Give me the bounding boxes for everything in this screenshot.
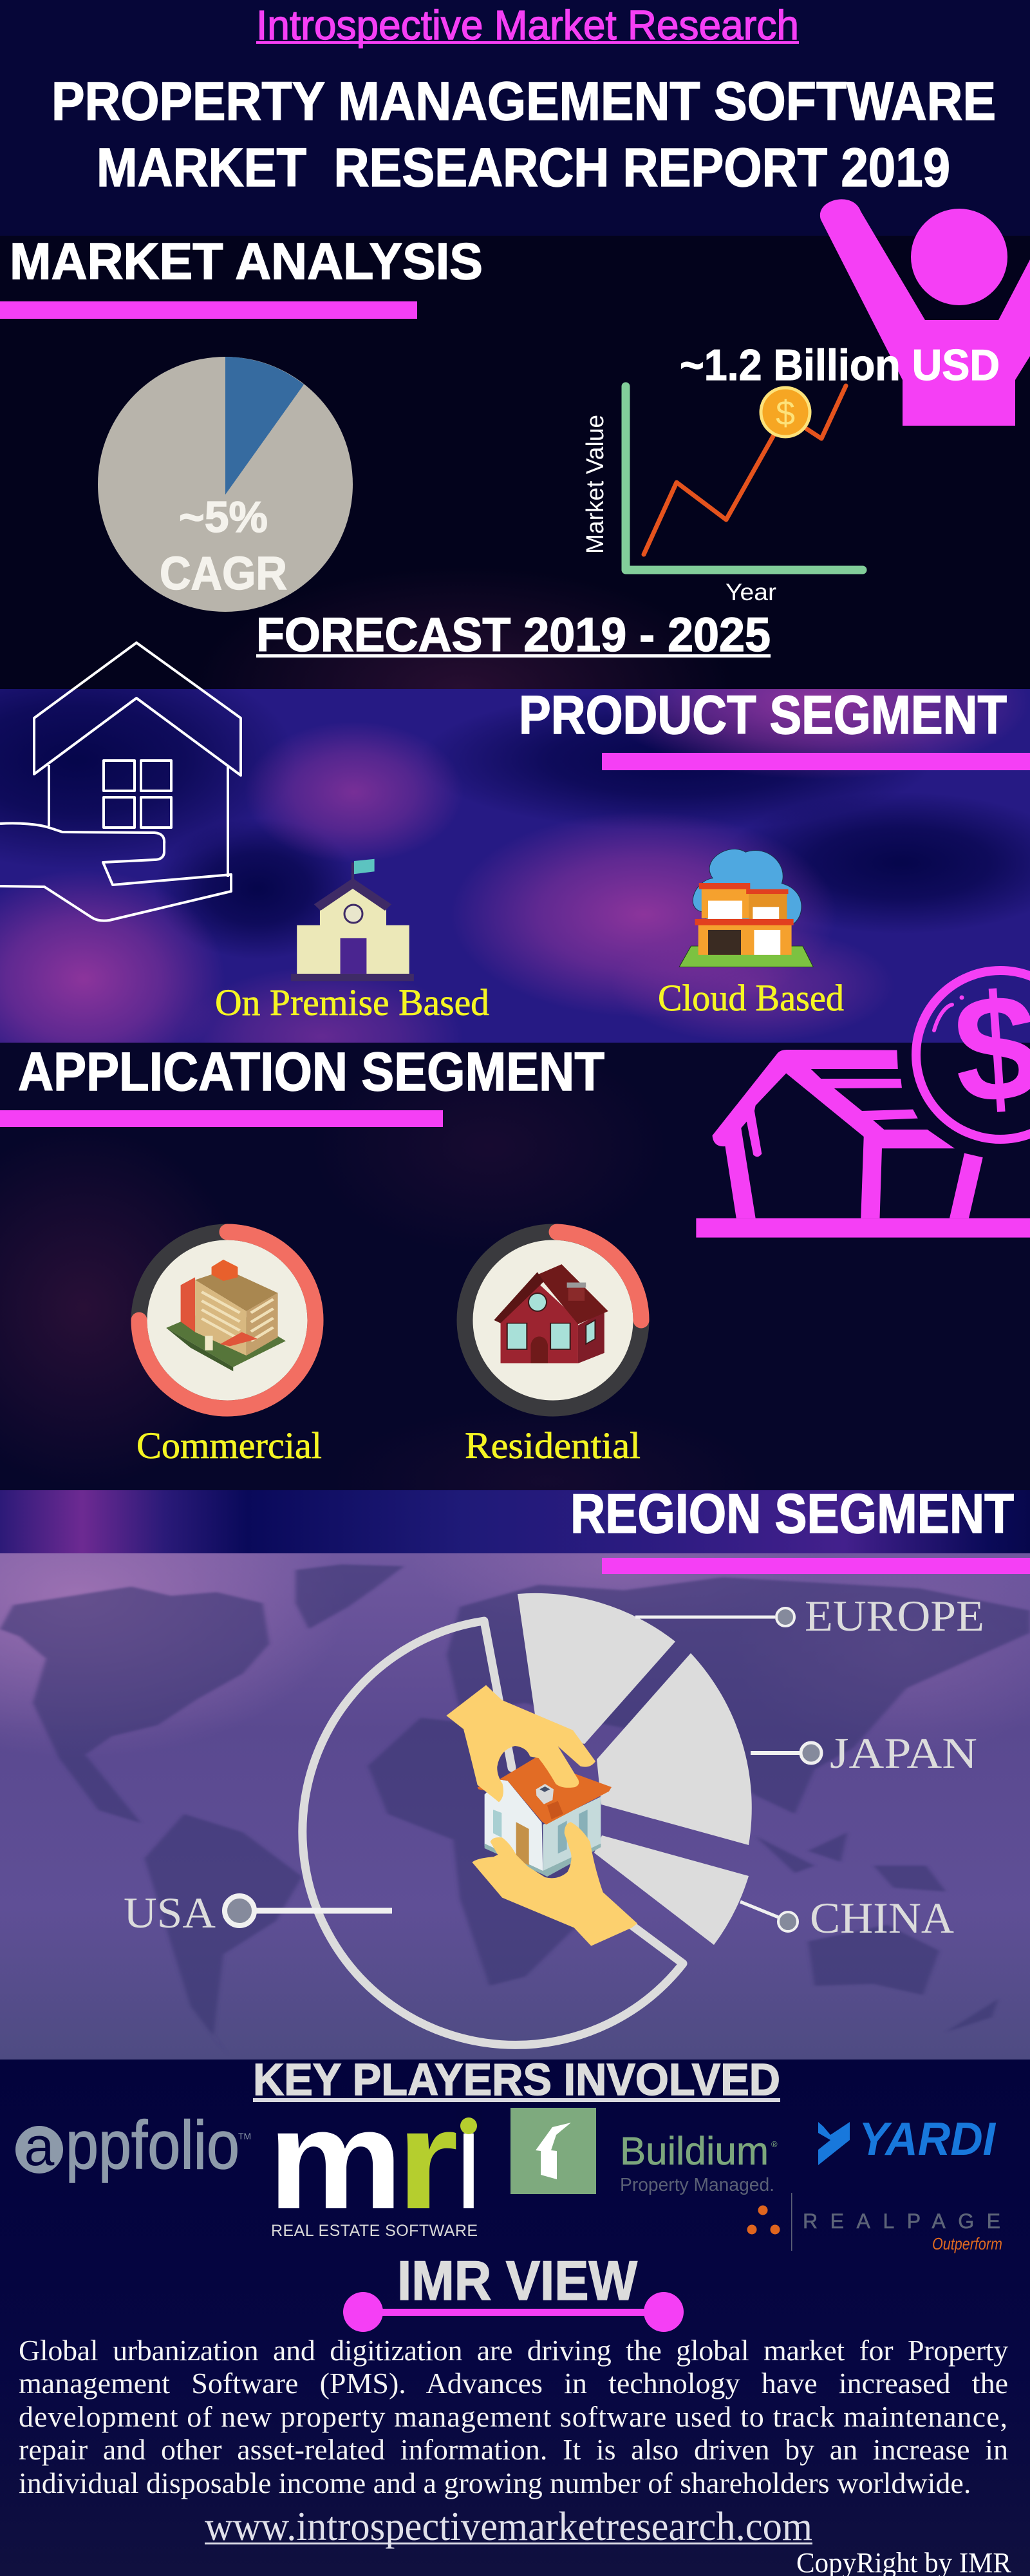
label: on premise based: On Premise Based: [215, 981, 489, 1023]
website link: www.introspectivemarketresearch.com: [205, 2503, 812, 2549]
heading: IMR view: IMR VIEW: [397, 2250, 638, 2312]
pie chart: regions: [303, 1593, 752, 2045]
value callout: ~1.2 Billion USD: [680, 341, 1000, 390]
heading: key players: KEY PLAYERS INVOLVED: [253, 2054, 780, 2105]
logo: Buildium: Property Managed.: [620, 2175, 774, 2195]
logo: appfolio: TM: [238, 2131, 251, 2141]
logo: mri: REAL ESTATE SOFTWARE: [271, 2222, 478, 2240]
text block: IMR view paragraph: individual disposable income and a growing number of shareholders worldwide.: [19, 2467, 971, 2499]
logo: appfolio: a: [24, 2116, 55, 2177]
forecast heading: FORECAST 2019 - 2025: [256, 608, 771, 661]
slice: Europe: [518, 1593, 675, 1744]
heading: market analysis: [0, 232, 483, 319]
logo: RealPage: REALPAGE: [803, 2210, 1000, 2233]
line chart: market value: $: [776, 394, 795, 433]
logo: mri: r: [397, 2080, 458, 2239]
callout: China: CHINA: [810, 1893, 954, 1942]
donut: residential: [465, 1232, 641, 1408]
logo: Buildium: [510, 2108, 778, 2195]
icon: house with dollar coin: [696, 961, 1030, 1238]
line chart: market value: Year: [726, 579, 776, 605]
logo: Buildium: Buildium: [620, 2129, 769, 2173]
callout: Japan: [751, 1728, 977, 1777]
slice: Japan: [597, 1653, 752, 1845]
logo: RealPage: Outperform: [932, 2234, 1002, 2253]
callout: USA: USA: [124, 1888, 216, 1937]
label: commercial: Commercial: [136, 1425, 322, 1466]
text block: IMR view paragraph: [19, 2334, 1008, 2499]
pie chart: CAGR: ~5%: [179, 493, 268, 542]
text block: IMR view paragraph: repair and other asset-related information. It is also driven by an increase in: [19, 2433, 1008, 2466]
pie chart: CAGR: [98, 357, 353, 612]
text block: IMR view paragraph: development of new property management software used to track maintenance,: [19, 2400, 1008, 2433]
logo: Buildium: ®: [771, 2139, 778, 2149]
icon: cheering person: [820, 199, 1030, 426]
heading: IMR view: [343, 2250, 684, 2332]
donut: commercial: [139, 1232, 315, 1408]
line chart: market value: Market Value: [582, 415, 609, 554]
brand heading: Introspective Market Research: [256, 2, 799, 48]
logo: mri: i: [458, 2080, 479, 2239]
heading: application segment: APPLICATION SEGMENT: [18, 1041, 604, 1102]
callout: USA: [124, 1888, 392, 1937]
pie chart: CAGR: CAGR: [160, 548, 287, 600]
icon: red house: [494, 1264, 608, 1363]
icon: hands exchanging house: [446, 1685, 637, 1946]
text block: IMR view paragraph: Global urbanization and digitization are driving the global market for Property: [19, 2334, 1008, 2367]
panel: header background: [0, 0, 1030, 236]
panel: market analysis background: [0, 236, 1030, 689]
callout: Japan: JAPAN: [830, 1728, 977, 1777]
callout: China: [740, 1893, 954, 1942]
text block: IMR view paragraph: management Software (PMS). Advances in technology have increased the: [19, 2367, 1008, 2400]
callout: Europe: EUROPE: [805, 1591, 984, 1640]
panel: product segment background: [0, 689, 1030, 1043]
logo: mri: [268, 2080, 482, 2240]
slice: USA outline: [303, 1621, 683, 2045]
line chart: market value: [582, 386, 863, 605]
panel: application segment background: [0, 1083, 653, 1490]
icon: on premise school building: [291, 859, 414, 981]
panel: region map background: [0, 1553, 1030, 2060]
icon: cloud based house: [679, 849, 813, 967]
slice: China: [594, 1835, 749, 1945]
heading: region segment: [570, 1483, 1030, 1574]
callout: Europe: [635, 1591, 984, 1640]
heading: market analysis: MARKET ANALYSIS: [10, 232, 483, 290]
title: MARKET RESEARCH REPORT 2019: [97, 137, 950, 198]
world map silhouette: [0, 1564, 1030, 2058]
icon: commercial building: [166, 1260, 286, 1371]
heading: application segment: [0, 1041, 604, 1127]
icon: house on hand outline: [0, 643, 241, 921]
label: cloud based: Cloud Based: [658, 977, 844, 1019]
panel: region header band: [0, 1490, 1030, 1553]
logo: appfolio: ppfolio: [66, 2107, 239, 2183]
label: residential: Residential: [465, 1425, 641, 1466]
title: [52, 71, 996, 198]
logo: mri: m: [268, 2080, 403, 2239]
logo: RealPage: [747, 2193, 1002, 2253]
panel: bottom background: [0, 2060, 1030, 2576]
logo: Yardi: YARDI: [859, 2114, 997, 2165]
